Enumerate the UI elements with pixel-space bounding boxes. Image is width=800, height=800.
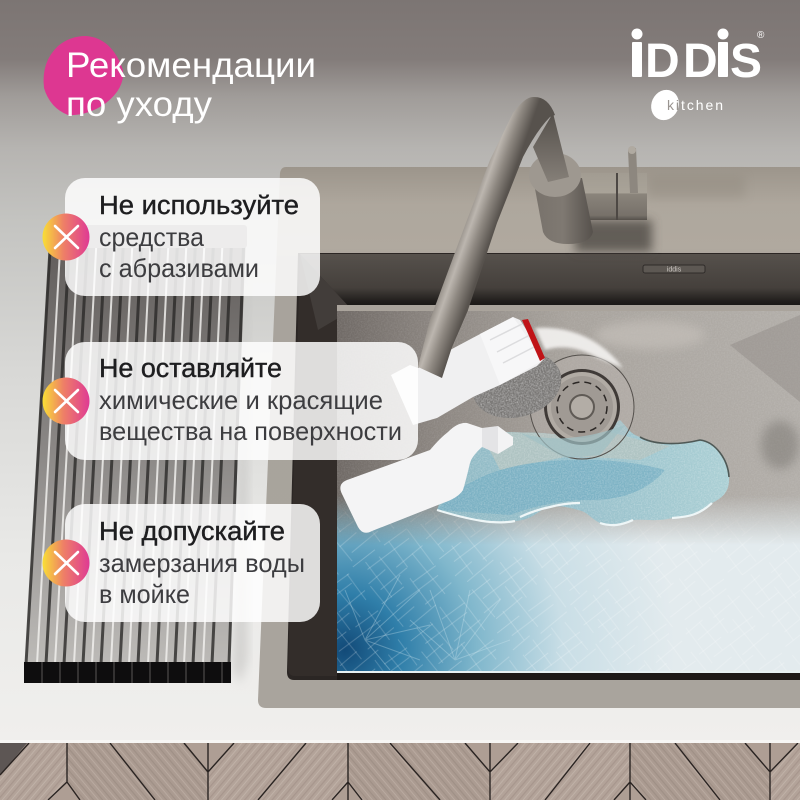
puddle over drain bbox=[520, 425, 625, 458]
brush with white handle bbox=[391, 317, 545, 425]
logo: IDDIS kitchen: kitchen bbox=[667, 97, 723, 113]
panel: card 3 bbox=[65, 504, 320, 622]
card 3 line 1: замерзания воды bbox=[99, 548, 305, 578]
powder residue bbox=[535, 328, 623, 368]
scouring pad bbox=[465, 342, 569, 428]
faucet descending arm bbox=[533, 113, 569, 182]
logo: IDDIS kitchen: ® bbox=[757, 30, 765, 41]
faucet shadow bbox=[575, 176, 745, 252]
sink bowl: iddis bbox=[667, 266, 682, 274]
faucet end over brush bbox=[418, 295, 468, 378]
icon: cross badge 1 bbox=[42, 214, 90, 260]
card 1 heading: Не используйте bbox=[99, 192, 299, 220]
card 2 heading: Не оставляйте bbox=[99, 355, 282, 383]
faucet neck bbox=[418, 97, 555, 378]
counter edge highlight bbox=[0, 740, 800, 743]
panel: card 1 bbox=[65, 178, 320, 296]
frozen ice on sink floor bbox=[337, 480, 800, 680]
drain bbox=[530, 355, 634, 459]
card 2 line 2: вещества на поверхности bbox=[99, 416, 402, 446]
rack black base bbox=[24, 662, 231, 683]
icon: cross badge 2 bbox=[42, 378, 90, 424]
card 1 line 1: средства bbox=[99, 222, 205, 252]
drying rack bbox=[24, 225, 248, 684]
card 3 line 2: в мойке bbox=[99, 579, 190, 609]
icon: cross badge 3 bbox=[42, 540, 90, 586]
rack top band bbox=[50, 225, 247, 248]
title: по уходу bbox=[66, 85, 213, 124]
faucet body bbox=[529, 146, 647, 244]
faucet bbox=[418, 97, 647, 378]
water puddle bbox=[437, 420, 737, 530]
logo: IDDIS kitchen: iDDiS bbox=[631, 35, 762, 88]
logo: IDDIS kitchen bbox=[631, 28, 765, 125]
sink bowl bbox=[287, 253, 800, 680]
card 3 heading: Не допускайте bbox=[99, 518, 285, 546]
cleaning bottle bbox=[340, 423, 513, 533]
wooden chevron floor bbox=[0, 742, 800, 800]
title accent blob bbox=[44, 36, 123, 115]
card 2 line 1: химические и красящие bbox=[99, 385, 383, 415]
title: Рекомендации bbox=[66, 46, 316, 85]
sink flange bbox=[258, 167, 800, 708]
title bbox=[66, 46, 316, 124]
card 1 line 2: с абразивами bbox=[99, 253, 259, 283]
panel: card 2 bbox=[65, 342, 418, 460]
